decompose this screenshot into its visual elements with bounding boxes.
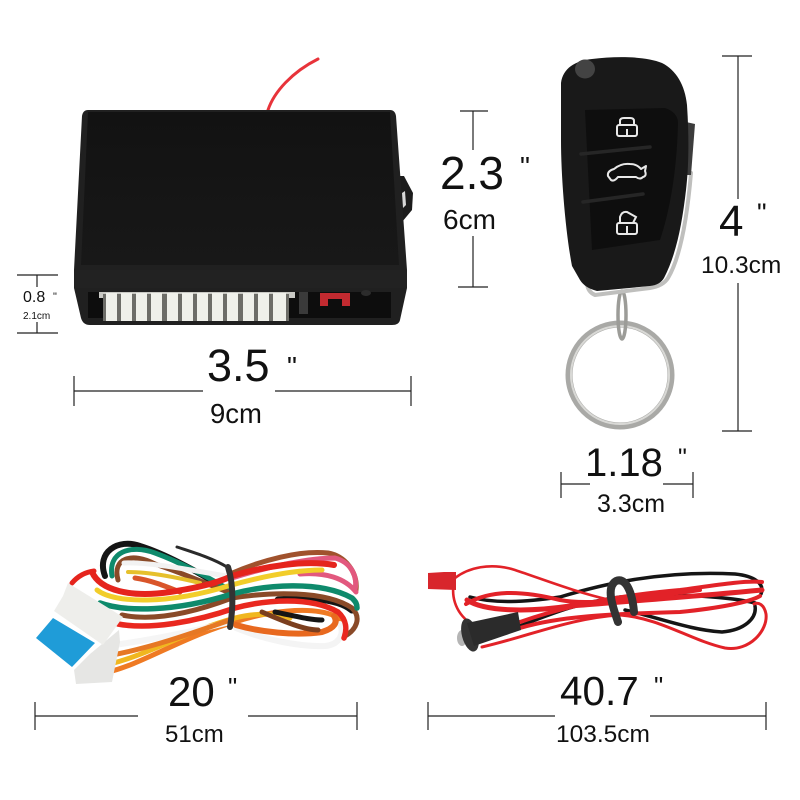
dimension: box depth 2.3 inch: 2.3 [440,147,504,199]
cable wires [453,566,766,648]
sensor flange [458,617,482,653]
port recess [88,292,391,318]
chrome edge [587,173,691,295]
white wiring connector [99,292,295,321]
dimension: fob length 4 inch: 10.3cm [701,252,781,279]
dimension: box height 0.8 inch: " [53,291,57,303]
box body [74,110,407,325]
dimension: fob length 4 inch: 4 [719,197,743,246]
dimension: box width 3.5 inch: 9cm [210,398,262,429]
remote key fob [561,57,695,426]
control box unit [74,59,413,325]
dimension: cable length 40.7 inch: 103.5cm [556,721,650,748]
grey switch [299,292,308,314]
dimension: cable length 40.7 inch: 40.7 [560,668,639,714]
dimension: cable length 40.7 inch: " [654,671,663,701]
first white connector [54,583,123,645]
dimension: box depth 2.3 inch: " [520,151,530,182]
fob body [561,57,688,291]
dimension: box height 0.8 inch: 0.8 [23,289,45,306]
dimension: harness length 20 inch: 51cm [165,721,224,748]
sensor tip [457,630,467,646]
button gaps [581,147,650,202]
icon: locked padlock [617,118,637,136]
dimension: fob length 4 inch [701,56,781,431]
metal blade folded [685,122,695,175]
dimension: cable length 40.7 inch [428,668,766,748]
dimension: fob width 1.18 inch [561,441,693,518]
box top face [81,112,399,265]
dimension: harness length 20 inch: 20 [168,668,215,715]
sensor body [467,612,521,646]
antenna wire [268,59,318,110]
dimension: box width 3.5 inch [74,340,411,429]
red and black sensor cable [428,566,766,653]
dimension: harness length 20 inch: " [228,672,237,702]
cable tie [611,580,634,622]
main wiring harness [36,544,357,684]
dimension: fob width 1.18 inch: " [678,444,687,472]
dimension: box depth 2.3 inch: 6cm [443,204,496,235]
dimension: box width 3.5 inch: 3.5 [207,340,270,391]
dimension: box height 0.8 inch: 2.1cm [23,311,50,322]
dimension: box depth 2.3 inch [440,111,530,287]
blue fuse [36,618,95,667]
icon: unlocked padlock [617,212,637,234]
red plug [428,572,456,590]
indicator light [361,290,371,296]
dimension: fob width 1.18 inch: 1.18 [585,441,663,485]
icon: car trunk [608,164,646,181]
flip button [575,60,595,78]
dimension: fob length 4 inch: " [757,198,767,228]
side mounting tab [398,176,413,222]
dimension: harness length 20 inch [35,668,357,748]
second white connector [74,630,120,684]
harness wires [72,544,357,672]
button pad [585,108,678,250]
red socket [320,293,350,306]
dimension: fob width 1.18 inch: 3.3cm [597,490,665,518]
cable tie [177,547,232,627]
key ring [569,324,671,426]
small link ring [618,291,626,339]
dimension: box height 0.8 inch [17,275,58,333]
dimension: box width 3.5 inch: " [287,351,297,382]
front band [74,270,407,288]
